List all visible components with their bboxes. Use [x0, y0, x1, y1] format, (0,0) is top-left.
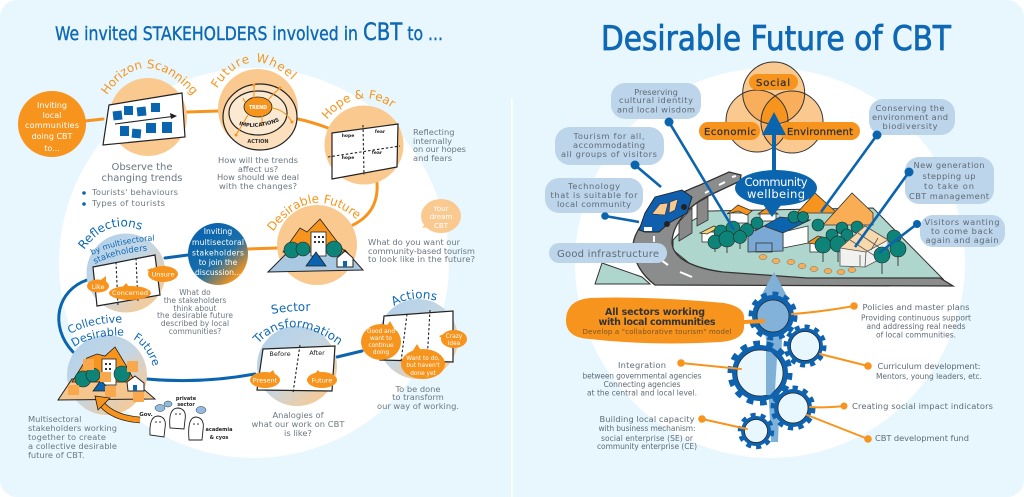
blob: inviting multisectoral stakeholders: Inviting	[204, 227, 232, 236]
callout: your dream cbt	[421, 199, 461, 233]
icon: stakeholder heads	[139, 396, 232, 441]
gear: local capacity	[740, 414, 772, 448]
text: analogies: Analogies of	[272, 410, 325, 420]
text: observe the changing trends: Observe the	[112, 162, 172, 173]
callout: technology: Technology	[567, 181, 620, 191]
step: sector transformation: Before	[269, 350, 291, 358]
label: policies and master plans: and addressing real needs	[866, 322, 966, 331]
connector lines	[59, 111, 377, 381]
icon: stakeholder heads: private	[176, 396, 197, 402]
landscape scene	[595, 172, 953, 286]
start blob: inviting local communities: to...	[44, 144, 60, 153]
callout: visitors wanting to come back: to come back	[931, 226, 993, 236]
text: how will the trends affect us: affect us?	[238, 164, 278, 174]
step: collective desirable future: Desirable	[70, 327, 124, 346]
callout: tourism for all: accommodating	[573, 140, 645, 150]
start blob: inviting local communities	[18, 91, 86, 157]
gear: integration	[730, 343, 790, 403]
step: hope and fear: fear	[372, 150, 383, 156]
text: analogies	[252, 410, 345, 438]
label: integration: between governmental agencies	[582, 372, 702, 380]
step: collective desirable future	[57, 314, 158, 415]
callout: tourism for all	[555, 127, 664, 187]
text: how will the trends affect us: with the changes?	[219, 181, 297, 191]
text: what do you want: community-based tourism	[368, 246, 475, 256]
step: actions: done yet	[410, 371, 437, 377]
start blob: inviting local communities: doing CBT	[32, 132, 73, 141]
arrow: up from wellbeing to pillars	[762, 112, 786, 174]
blob: inviting multisectoral stakeholders	[188, 223, 248, 285]
text: what do you want: to look like in the future?	[368, 254, 475, 264]
label: policies and master plans: Policies and master plans	[862, 302, 970, 312]
step: hope and fear: Hope & Fear	[321, 90, 396, 119]
text: what do the stakeholders think: described by local	[161, 319, 229, 328]
step: actions: Want to do,	[406, 356, 440, 362]
label: building local capacity: with business mechanism:	[598, 424, 696, 433]
step: reflections	[78, 218, 178, 312]
text: to be done: to transform	[392, 392, 444, 402]
step: actions: but haven't	[406, 363, 440, 369]
text: reflecting internally: and fears	[413, 153, 452, 163]
label: integration	[582, 359, 741, 398]
text: what do the stakeholders think	[157, 288, 233, 336]
text: how will the trends affect us: How will the trends	[218, 155, 298, 165]
text: multisectoral stakeholders working together: together to create	[28, 432, 106, 442]
step: sector transformation	[250, 302, 342, 406]
step: sector transformation: Transformation	[252, 318, 342, 345]
label: policies and master plans: Providing continuous support	[861, 314, 971, 322]
label: curriculum development	[820, 354, 982, 381]
callout: all sectors working with local communities: Develop a "collaborative tourism" model	[582, 328, 732, 336]
heading: desirable future of cbt: Desirable Future of CBT	[601, 19, 951, 59]
gears	[730, 294, 824, 448]
text: how will the trends affect us	[217, 155, 299, 191]
callout: tourism for all: all groups of visitors	[561, 149, 657, 159]
callout: visitors wanting to come back: Visitors wanting	[924, 217, 1000, 227]
step: sector transformation: Present	[253, 376, 278, 384]
step: reflections: by multisectoral	[90, 234, 154, 255]
trees	[708, 211, 906, 257]
start blob: inviting local communities: communities	[25, 121, 79, 130]
callout: new generation: CBT management	[909, 191, 990, 201]
callout: conserving environment: environment and	[872, 112, 948, 122]
callout: your dream cbt: dream	[430, 213, 452, 221]
bubble: community wellbeing: wellbeing	[747, 187, 805, 201]
venn diagram: social economic environment: Environment	[787, 127, 853, 138]
callout: new generation: New generation	[914, 160, 984, 170]
step: actions: idea	[448, 341, 461, 347]
callout: your dream cbt: Your	[433, 205, 449, 213]
text: analogies: is like?	[284, 428, 312, 438]
step: sector transformation: Future	[312, 376, 332, 384]
callout: good infrastructure	[549, 243, 667, 263]
text: multisectoral stakeholders working together: Multisectoral	[28, 414, 81, 424]
callout: preserving cultural identity: and local wisdom	[617, 104, 695, 114]
step: hope and fear: hope	[342, 133, 354, 139]
text: multisectoral stakeholders working together: future of CBT.	[28, 450, 85, 460]
text: what do the stakeholders think: communities?	[169, 327, 221, 336]
step: actions	[361, 290, 467, 379]
text: what do the stakeholders think: think about	[174, 304, 217, 313]
stepping stones	[759, 254, 856, 274]
venn diagram: social economic environment: Social	[756, 78, 790, 89]
left ground wedge	[595, 263, 650, 284]
label: integration: Integration	[618, 360, 666, 370]
step: actions: Crazy	[446, 334, 463, 340]
step: reflections: Concerned	[112, 289, 148, 297]
label: integration: Connecting agencies	[604, 380, 681, 389]
gear: social impact	[772, 388, 814, 428]
icon: stakeholder heads: sector	[177, 402, 195, 408]
callout: conserving environment: biodiversity	[882, 121, 938, 131]
label: cbt development fund: CBT development fund	[875, 433, 969, 443]
callout: preserving cultural identity: cultural identity	[619, 95, 693, 105]
step: actions: doing	[373, 350, 389, 356]
callout: technology	[545, 178, 643, 222]
step: future wheel: IMPLICATIONS	[239, 118, 279, 127]
callout: tourism for all: Tourism for all,	[572, 131, 644, 141]
step: hope and fear	[321, 90, 404, 184]
label: creating social impact indicators: Creating social impact indicators	[852, 401, 993, 411]
bubble: community wellbeing: Community	[744, 175, 808, 189]
big light blue arrow	[761, 272, 787, 442]
callout: technology: that is suitable for	[550, 190, 638, 200]
gear: curriculum	[786, 326, 824, 366]
venn diagram: social economic environment: Economic	[704, 127, 756, 138]
label: building local capacity: community enterprise (CE)	[597, 442, 697, 451]
step: reflections: stakeholders	[94, 246, 147, 264]
step: collective desirable future: Collective	[68, 314, 122, 333]
left panel: stakeholder process	[18, 18, 475, 460]
icon: blue car	[639, 190, 692, 232]
arrow: stakeholders to collective future	[95, 396, 140, 420]
text: what do you want: What do you want our	[368, 237, 461, 247]
step: future wheel: Future Wheel	[210, 53, 298, 88]
label: policies and master plans: of local communities.	[876, 330, 956, 340]
text: observe the changing trends	[82, 162, 182, 208]
text: reflecting internally: on our hopes	[413, 144, 466, 154]
text: how will the trends affect us: How should we deal	[217, 172, 299, 182]
callout: new generation: to take on	[924, 181, 974, 191]
text: to be done	[377, 384, 459, 411]
step: future wheel: ACTION	[247, 139, 269, 145]
callout: your dream cbt: CBT	[434, 222, 449, 230]
callout: all sectors working with local communities: All sectors working	[605, 307, 705, 318]
mountains	[797, 193, 837, 213]
text: reflecting internally	[413, 127, 466, 163]
callout: good infrastructure: Good infrastructure	[557, 249, 659, 260]
step: sector transformation: Sector	[271, 302, 310, 314]
blob: inviting multisectoral stakeholders: stakeholders	[192, 248, 244, 258]
text: reflecting internally: Reflecting	[413, 127, 454, 137]
step: sector transformation: After	[309, 349, 325, 357]
text: what do the stakeholders think: What do	[179, 288, 211, 297]
callout: visitors wanting to come back: again and again	[926, 235, 998, 245]
road pillars	[679, 197, 708, 241]
icon: stakeholder heads: & cyos	[210, 435, 228, 441]
callout: new generation: stepping up	[922, 171, 976, 181]
road	[633, 172, 953, 286]
text: to be done: To be done	[394, 384, 441, 394]
step: hope and fear: fear	[375, 129, 386, 135]
icon: stakeholder heads: Gov.	[139, 412, 153, 418]
callout: all sectors working with local communities	[566, 298, 765, 343]
label: building local capacity: social enterprise (SE) or	[601, 434, 694, 443]
bubble: community wellbeing	[735, 170, 817, 217]
callout: conserving environment: Conserving the	[876, 103, 944, 113]
heading: we invited stakeholders: We invited STAKEHOLDERS involved in CBT to ...	[55, 18, 443, 46]
label: building local capacity: Building local capacity	[600, 414, 695, 424]
label: integration: at the central and local level.	[587, 388, 697, 398]
text: observe the changing trends: Tourists' behaviours	[91, 187, 178, 197]
text: analogies: what our work on CBT	[252, 419, 345, 429]
step: future wheel	[210, 53, 298, 151]
step: desirable future: Desirable Future	[266, 194, 360, 231]
text: multisectoral stakeholders working together: a collective desirable	[28, 441, 117, 451]
houses	[700, 205, 826, 252]
text: multisectoral stakeholders working together: stakeholders working	[28, 423, 117, 433]
step: actions: continue	[368, 343, 394, 349]
label: building local capacity	[597, 414, 747, 451]
right panel: desirable future of CBT	[545, 19, 1005, 451]
blob: inviting multisectoral stakeholders: to join the	[199, 258, 238, 267]
step: hope and fear: hope	[342, 155, 354, 161]
start blob: inviting local communities: local	[43, 111, 61, 120]
text: what do the stakeholders think: the stakeholders	[164, 296, 226, 305]
text: reflecting internally: internally	[413, 136, 452, 146]
icon: stakeholder heads: academia	[206, 427, 232, 433]
label: policies and master plans	[792, 302, 971, 340]
blob: inviting multisectoral stakeholders: discussion...	[195, 268, 241, 277]
gear: policies	[750, 294, 796, 338]
step: horizon scanning	[100, 60, 197, 156]
label: curriculum development: Curriculum development:	[878, 361, 980, 371]
step: desirable future	[266, 194, 364, 285]
text: observe the changing trends: Types of tourists	[91, 198, 165, 208]
ground	[673, 208, 943, 279]
callout: new generation	[855, 157, 994, 247]
label: curriculum development: Mentors, young leaders, etc.	[876, 372, 982, 381]
text: multisectoral stakeholders working together	[28, 414, 117, 460]
step: actions: Good and	[367, 329, 395, 335]
text: what do the stakeholders think: the desirable future	[157, 311, 233, 320]
step: reflections: Unsure	[152, 270, 174, 278]
blob: inviting multisectoral stakeholders: multisectoral	[192, 238, 244, 247]
callout: technology: local community	[557, 199, 631, 209]
step: horizon scanning: Horizon Scanning	[100, 60, 197, 96]
text: what do you want	[368, 237, 475, 264]
step: reflections: Like	[92, 283, 104, 291]
step: future wheel: TREND	[249, 105, 267, 111]
step: collective desirable future: Future	[134, 332, 158, 366]
start blob: inviting local communities: Inviting	[37, 101, 67, 110]
callout: conserving environment	[821, 99, 955, 212]
text: observe the changing trends: changing trends	[102, 173, 182, 184]
text: to be done: our way of working.	[377, 401, 459, 411]
callout: preserving cultural identity	[611, 83, 734, 230]
callout: visitors wanting to come back	[879, 215, 1005, 253]
step: actions: want to	[370, 336, 392, 342]
greenhouse	[840, 226, 888, 267]
callout: all sectors working with local communities: with local communities	[598, 317, 716, 328]
venn diagram: social economic environment	[699, 62, 860, 153]
callout: preserving cultural identity: Preserving	[634, 87, 678, 97]
label: cbt development fund	[807, 415, 969, 443]
step: reflections: Reflections	[78, 218, 142, 249]
step: actions: Actions	[392, 290, 437, 306]
